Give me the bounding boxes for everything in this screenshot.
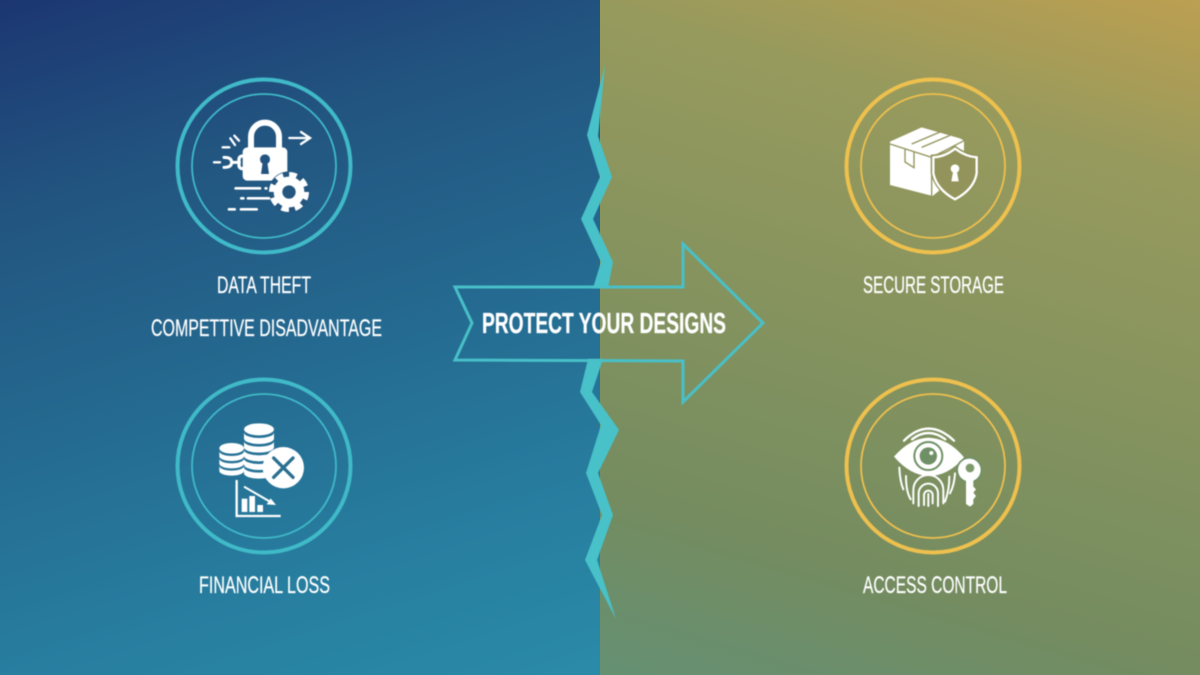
panel: financial loss item [178, 380, 350, 599]
panel: access control item [846, 380, 1020, 599]
label: data theft: DATA THEFT [217, 272, 311, 299]
label: secure storage: SECURE STORAGE [863, 272, 1004, 299]
panel: secure storage item [846, 80, 1020, 299]
label: access control: ACCESS CONTROL [863, 572, 1007, 599]
panel: data theft item [178, 80, 350, 299]
panel: threats background [0, 0, 600, 675]
icon: coins with falling chart [219, 423, 304, 516]
arrow label: PROTECT YOUR DESIGNS [482, 308, 726, 340]
arrow: protect your designs [455, 244, 763, 402]
outer and inner ring [846, 80, 1020, 252]
outer and inner ring [846, 380, 1020, 552]
jagged crack divider [580, 65, 619, 619]
panel: protection background [600, 0, 1200, 675]
icon: padlock with chain and gear [214, 123, 310, 213]
outer and inner ring [178, 80, 350, 252]
icon: eye, fingerprint and key [894, 429, 982, 507]
outer and inner ring [178, 380, 350, 552]
label: financial loss: FINANCIAL LOSS [199, 572, 330, 599]
icon: box with shield [890, 127, 979, 203]
label: competitive disadvantage: COMPETTIVE DISADVANTAGE [151, 315, 382, 342]
